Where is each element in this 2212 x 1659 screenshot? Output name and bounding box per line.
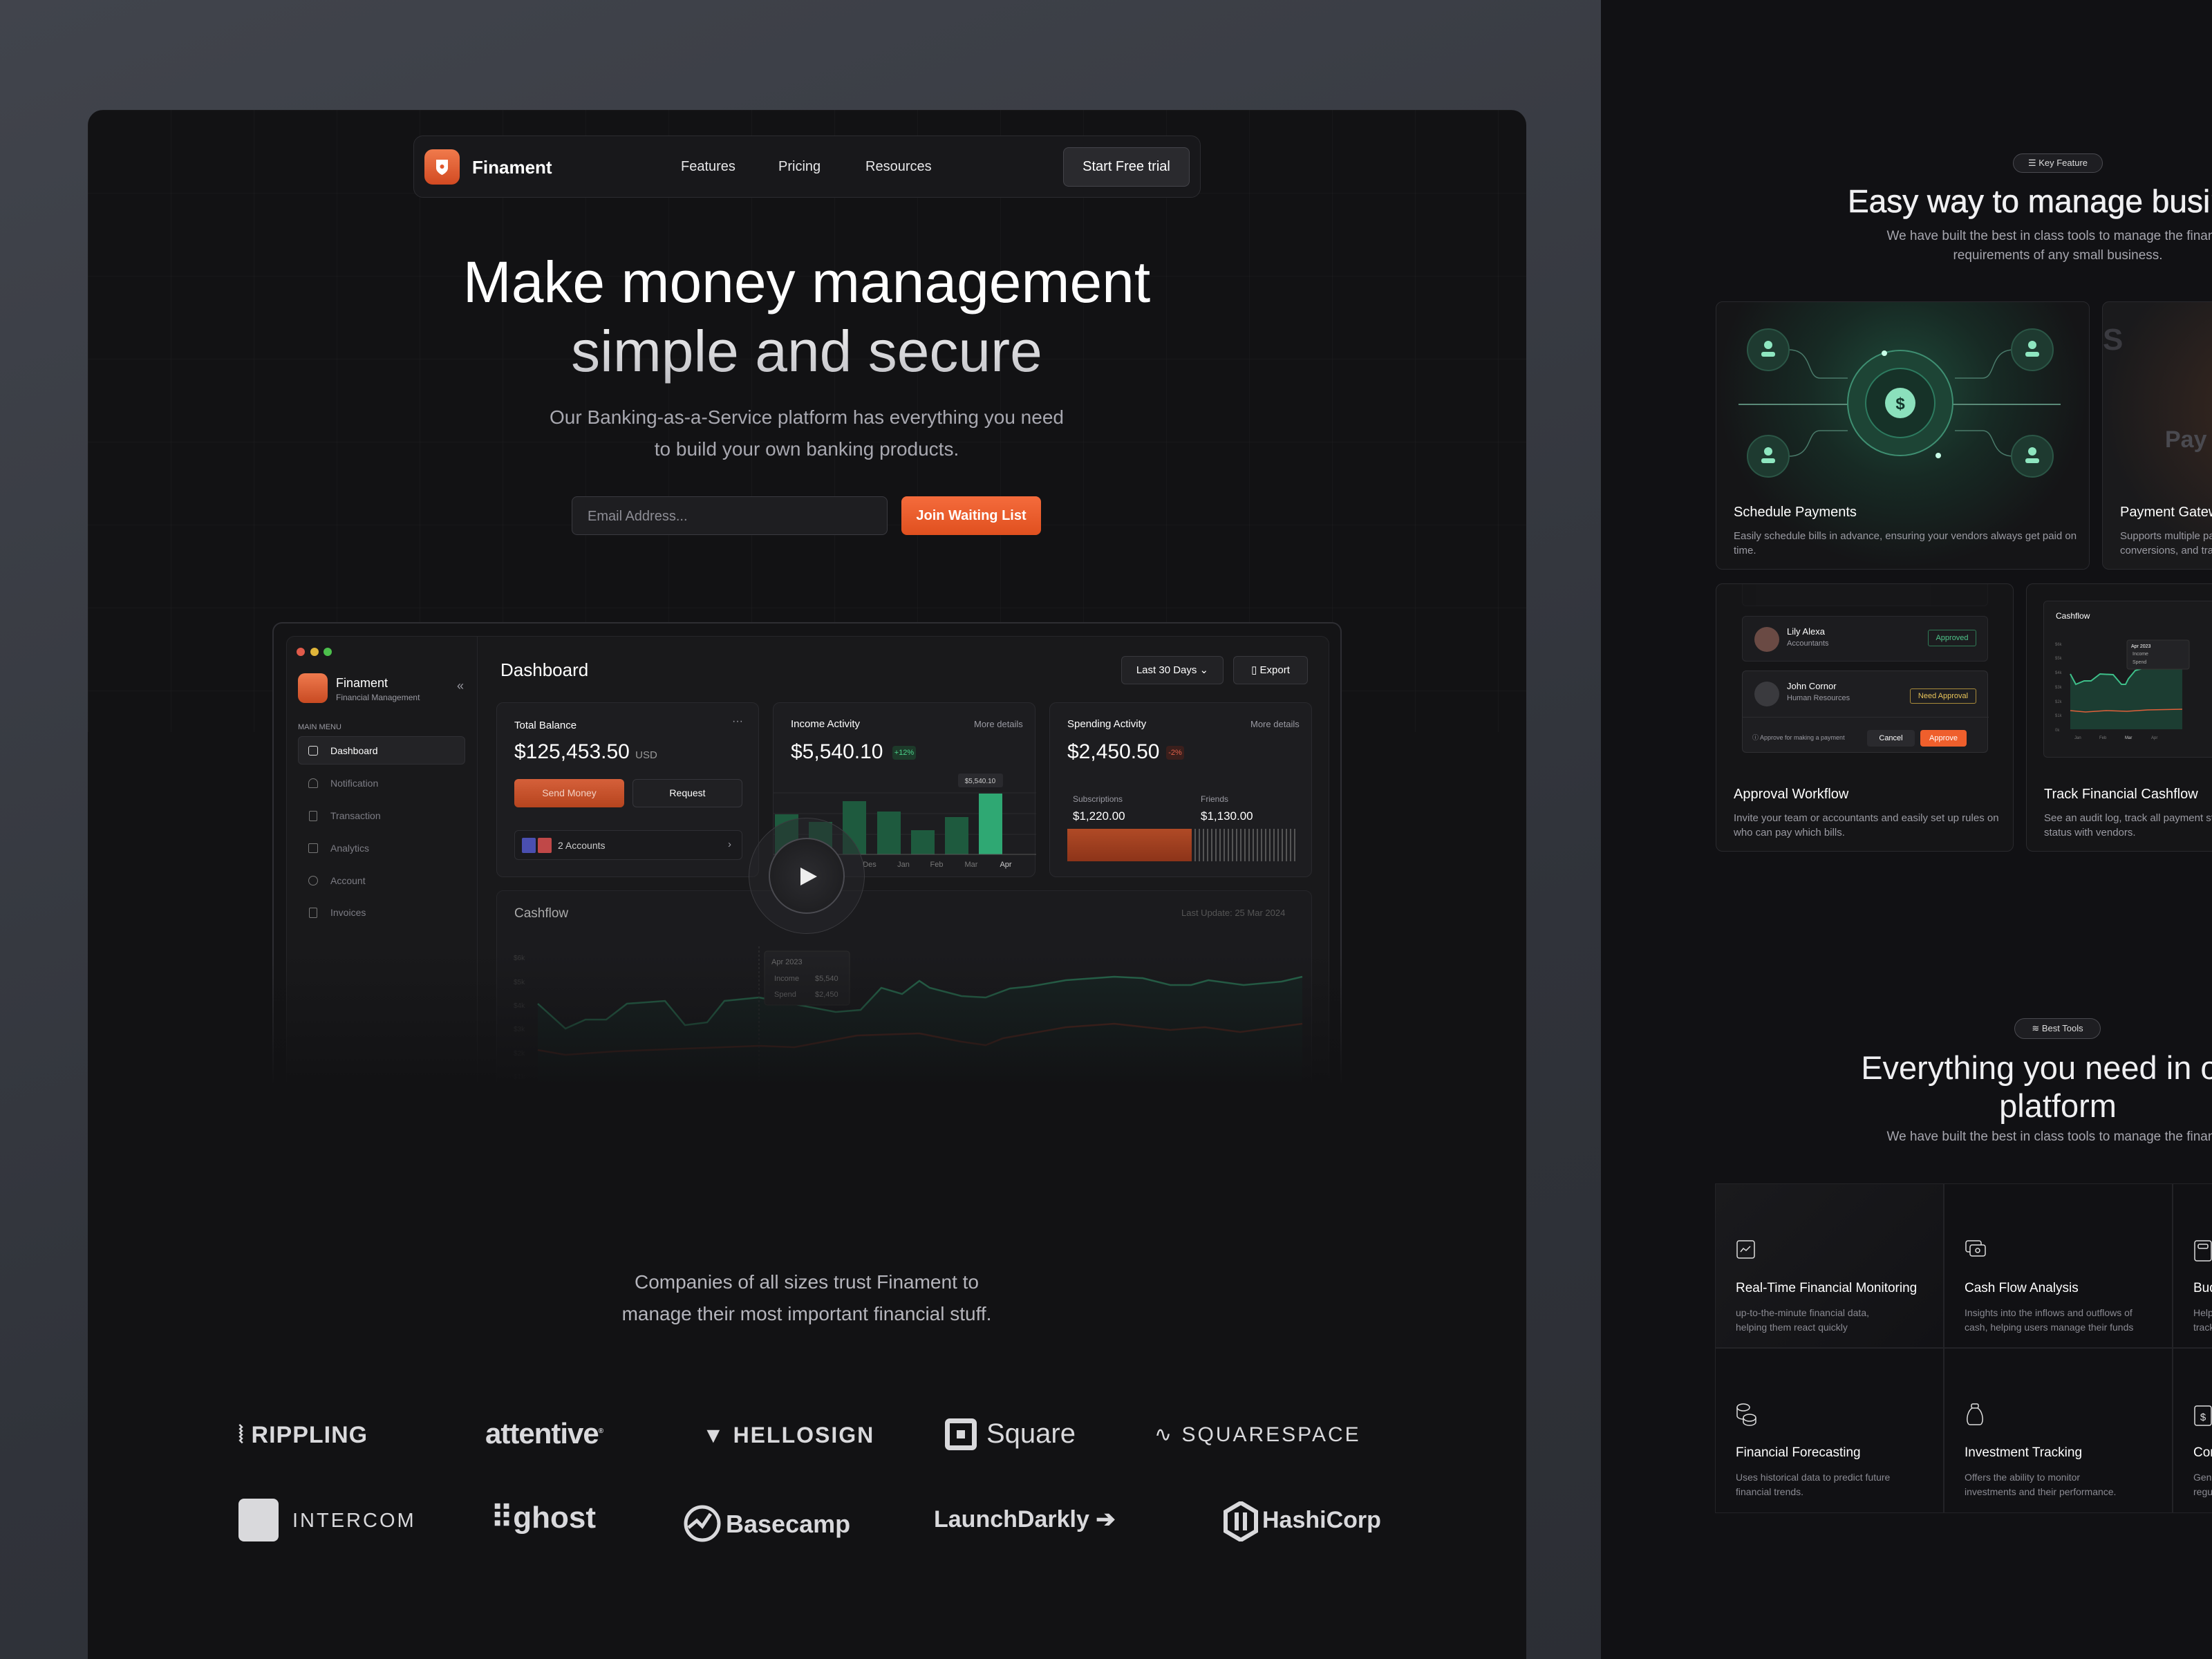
card: schedule payments (1716, 301, 2090, 570)
card: income activity: Income Activity (791, 718, 860, 730)
input: email (572, 496, 888, 535)
mini cashflow chart: Spend (2133, 660, 2146, 665)
sidebar: MAIN MENU (298, 723, 341, 731)
line chart: cashflow: $6k (514, 955, 525, 962)
panel: left landing page card (88, 110, 1526, 1659)
mini cashflow chart: $5k (2055, 657, 2063, 661)
mini cashflow chart: Apr (2151, 736, 2157, 740)
nav links: Pricing (778, 159, 821, 174)
mini cashflow chart: Jan (2074, 736, 2081, 740)
badge: best tools: ≋ Best Tools (2032, 1023, 2083, 1033)
hero title (323, 247, 1291, 386)
tool: real-time monitoring (1715, 1183, 1944, 1348)
window dots (297, 648, 332, 656)
bar chart: income: Des (863, 861, 877, 869)
card: payment gateway: Pay (2165, 427, 2206, 453)
button: request: Request (669, 787, 706, 798)
logo: basecamp (684, 1506, 850, 1541)
subtitle: key feature (1886, 229, 2212, 263)
line chart: cashflow: $2,450 (815, 991, 838, 999)
mini cashflow chart: Mar (2125, 736, 2132, 740)
line chart: cashflow: $4k (514, 1002, 525, 1010)
mini cashflow chart: $1k (2055, 714, 2063, 718)
logo: basecamp: Basecamp (726, 1510, 850, 1538)
panel: right features page (1601, 0, 2212, 1659)
card: spending activity: Subscriptions (1073, 794, 1123, 804)
card: spending activity: -2% (1168, 749, 1182, 757)
approval row: lily alexa: Accountants (1787, 639, 1829, 648)
card: spending activity: Friends (1201, 794, 1228, 804)
logo: square (945, 1418, 1076, 1450)
heading: everything you need: platform (1999, 1087, 2117, 1124)
subtitle: key feature: requirements of any small business. (1953, 248, 2163, 263)
sidebar: « (457, 679, 464, 693)
tool: financial forecasting: Financial Forecasting (1736, 1445, 1861, 1460)
line chart: cashflow: $1k (514, 1074, 525, 1081)
approval row: john cornor: Human Resources (1787, 694, 1850, 702)
logo: intercom: INTERCOM (292, 1510, 416, 1532)
nav links (681, 159, 932, 174)
card: approval workflow: Approval Workflow (1734, 787, 1848, 802)
card: spending activity: $1,130.00 (1201, 809, 1253, 823)
menu: active dashboard (298, 736, 465, 765)
logo: rippling: ⦚ RIPPLING (238, 1422, 368, 1448)
button: export: ▯ Export (1251, 664, 1290, 676)
mini cashflow chart: Cashflow (2056, 611, 2090, 621)
icon: play button (749, 818, 865, 934)
input: email: Email Address... (588, 509, 688, 524)
menu items: Analytics (330, 843, 369, 854)
card: total balance: ··· (732, 715, 743, 727)
tool: real-time monitoring: Real-Time Financial Monitoring (1736, 1281, 1917, 1295)
logo: attentive: attentive® (485, 1417, 603, 1450)
icon: logo (424, 149, 460, 185)
dashboard heading: Dashboard (500, 659, 588, 680)
button: join waiting list (901, 496, 1041, 535)
tool: compliance: $ (2200, 1412, 2206, 1423)
hero title: Make money management (463, 250, 1150, 315)
tool: cash flow analysis (1944, 1183, 2173, 1348)
card: payment gateway (2102, 301, 2212, 570)
badge: key feature: ☰ Key Feature (2028, 158, 2088, 168)
tool: cash flow analysis: cash, helping users manage their funds (1965, 1322, 2133, 1333)
brand name: Finament (472, 157, 552, 178)
mini cashflow chart: $3k (2055, 686, 2063, 690)
logo: squarespace: ∿ SQUARESPACE (1154, 1423, 1361, 1446)
card: spending activity: More details (1250, 719, 1300, 729)
card: cashflow chart: Cashflow (514, 906, 568, 921)
accounts row: › (728, 838, 731, 850)
card: income activity: $5,540.10 (791, 740, 883, 763)
logo: hashicorp: HashiCorp (1262, 1507, 1381, 1533)
tools grid (1715, 1183, 2212, 1513)
card: track financial cashflow: status with vendors. (2044, 827, 2136, 838)
line chart: cashflow: $3k (514, 1026, 525, 1033)
illustration: payment network: $ (1895, 395, 1905, 413)
accounts row (514, 830, 742, 860)
sidebar: Finament (336, 676, 388, 690)
card: schedule payments: Schedule Payments (1734, 505, 1857, 520)
approval row: john cornor: Need Approval (1918, 692, 1968, 700)
nav bar (413, 135, 1201, 198)
line chart: cashflow: Income (774, 975, 799, 983)
hero subtitle (550, 406, 1064, 460)
approval row: john cornor: ⓘ Approve for making a payment (1752, 734, 1845, 741)
logo: intercom (238, 1499, 416, 1541)
card: cashflow chart: Last Update: 25 Mar 2024 (1181, 908, 1285, 918)
sidebar logo (298, 673, 328, 703)
mini cashflow chart: $4k (2055, 671, 2063, 675)
mini cashflow chart: Income (2133, 652, 2148, 657)
tool: investment tracking (1944, 1348, 2173, 1513)
badge: key feature (2013, 153, 2103, 173)
card: track financial cashflow: Track Financial Cashflow (2044, 787, 2198, 802)
approval row: lily alexa: Approved (1936, 634, 1969, 642)
email form (572, 496, 1041, 535)
menu items: Invoices (330, 907, 366, 918)
logo wall (238, 1417, 1381, 1541)
nav links: Resources (865, 159, 932, 174)
approval row: lily alexa: Lily Alexa (1787, 626, 1825, 637)
logo: launchdarkly: LaunchDarkly ➔ (934, 1506, 1116, 1533)
accounts row: 2 Accounts (558, 840, 606, 851)
mini cashflow chart: Feb (2099, 736, 2107, 740)
mini cashflow chart: Apr 2023 (2131, 644, 2151, 649)
bar: friends (1194, 829, 1297, 861)
approval row: john cornor: John Cornor (1787, 681, 1837, 691)
button: last 30 days (1121, 656, 1224, 684)
line chart: cashflow (514, 946, 1302, 1081)
tool: real-time monitoring: helping them react quickly (1736, 1322, 1848, 1333)
hero subtitle: Our Banking-as-a-Service platform has everything you need (550, 406, 1064, 428)
hero subtitle: to build your own banking products. (655, 438, 959, 460)
bar chart: income: Feb (930, 861, 943, 869)
logo: hellosign: ▼ HELLOSIGN (702, 1423, 874, 1447)
logo: hashicorp (1224, 1501, 1381, 1541)
sidebar (298, 673, 465, 918)
mini cashflow chart: $2k (2055, 700, 2063, 704)
tool: compliance (2173, 1348, 2212, 1513)
menu items: Transaction (330, 810, 381, 821)
card: spending activity (1049, 702, 1312, 877)
card: approval workflow (1716, 583, 2014, 852)
card: cashflow chart (496, 890, 1312, 1112)
line chart: cashflow: $2k (514, 1050, 525, 1058)
button: last 30 days: Last 30 Days ⌄ (1136, 664, 1208, 676)
menu items: Account (330, 875, 366, 886)
line chart: cashflow: Spend (774, 991, 796, 999)
card: schedule payments: Easily schedule bills in advance, ensuring your vendors always get paid on time. (1734, 530, 2077, 556)
card: payment gateway: S (2103, 323, 2123, 357)
tool: investment tracking: Offers the ability to monitor (1965, 1472, 2080, 1483)
tool: financial forecasting: Uses historical data to predict future (1736, 1472, 1890, 1483)
approval row: john cornor: Cancel (1879, 734, 1903, 742)
menu items (308, 745, 381, 918)
line chart: cashflow: Apr 2023 (771, 958, 803, 966)
card: total balance (496, 702, 759, 877)
nav links: Features (681, 159, 735, 174)
approval row: john cornor: Approve (1929, 734, 1958, 742)
tool: financial forecasting: financial trends. (1736, 1486, 1803, 1497)
card: income activity (773, 702, 1035, 877)
card: income activity: +12% (894, 749, 914, 757)
logo: ghost: ⠿ghost (491, 1501, 596, 1535)
bar chart: income: Mar (965, 861, 978, 869)
line chart: cashflow: $5k (514, 979, 525, 986)
button: send money: Send Money (542, 787, 597, 798)
sidebar: Financial Management (336, 693, 420, 702)
bar: subscriptions (1067, 829, 1192, 861)
card: approval workflow: Invite your team or accountants and easily set up rules on who can pay which bills. (1734, 812, 1999, 838)
mini cashflow chart (2043, 601, 2212, 758)
badge: best tools (2014, 1018, 2101, 1039)
mini cashflow chart: $6k (2055, 643, 2063, 647)
tool: cash flow analysis: Insights into the inflows and outflows of (1965, 1307, 2133, 1318)
trust statement: Companies of all sizes trust Finament to (635, 1271, 979, 1293)
tool: financial forecasting (1715, 1348, 1944, 1513)
menu items: Notification (330, 778, 378, 789)
card: spending activity: Spending Activity (1067, 718, 1146, 730)
tool: cash flow analysis: Cash Flow Analysis (1965, 1281, 2079, 1295)
illustration: payment network (1738, 328, 2061, 478)
approval row: john cornor (1742, 671, 1988, 753)
menu items: Dashboard (330, 745, 377, 756)
tool: investment tracking: Investment Tracking (1965, 1445, 2082, 1460)
button: send money (514, 779, 624, 807)
card: total balance: $125,453.50 USD (514, 740, 657, 763)
button: request (632, 779, 742, 807)
button: join waiting list: Join Waiting List (916, 508, 1027, 523)
trust statement (622, 1271, 991, 1324)
approval row: lily alexa (1742, 616, 1988, 662)
card: total balance: Total Balance (514, 720, 577, 731)
bar chart: income: Jan (897, 861, 910, 869)
card: spending activity: $2,450.50 (1067, 740, 1159, 763)
card: spending activity: $1,220.00 (1073, 809, 1125, 823)
card: track financial cashflow (2026, 583, 2212, 852)
bar chart: income: Apr (1000, 861, 1012, 869)
tool: budgeting (2173, 1183, 2212, 1348)
logo: square: Square (986, 1418, 1076, 1449)
tool: real-time monitoring: up-to-the-minute financial data, (1736, 1307, 1869, 1318)
hero title: simple and secure (571, 319, 1042, 384)
button: start free trial: Start Free trial (1082, 159, 1170, 174)
button: export (1233, 656, 1308, 684)
heading: everything you need (1861, 1049, 2212, 1124)
button: start free trial (1063, 147, 1190, 187)
mini cashflow chart: 0k (2055, 729, 2060, 733)
bar chart: income: $5,540.10 (965, 778, 996, 785)
trust statement: manage their most important financial stuff. (622, 1303, 991, 1324)
card: income activity: More details (974, 719, 1023, 729)
dashboard mockup (272, 622, 1342, 1106)
line chart: cashflow: $5,540 (815, 975, 838, 983)
bar chart: income (774, 774, 1036, 869)
tool: investment tracking: investments and their performance. (1965, 1486, 2116, 1497)
